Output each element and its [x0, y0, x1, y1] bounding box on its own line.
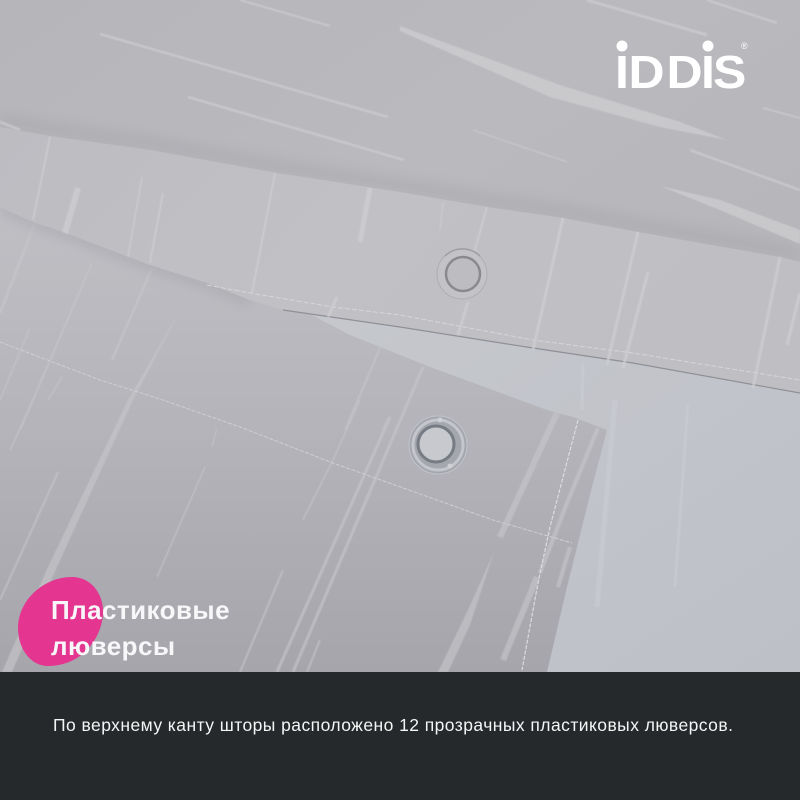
light underside layer [250, 300, 800, 672]
heading [51, 595, 230, 661]
fold shadow [0, 207, 250, 300]
lower flap [0, 200, 607, 672]
caption band [0, 672, 800, 800]
logo: IDDIS: ® [741, 41, 748, 51]
heading: Пластиковые [51, 595, 230, 625]
heading: люверсы [51, 631, 176, 661]
upper curtain layer [0, 0, 800, 320]
hem with stitching [0, 127, 800, 393]
logo: IDDIS: IDDIS [615, 48, 746, 98]
grommet: upper [437, 249, 487, 299]
caption text: По верхнему канту шторы расположено 12 прозрачных пластиковых люверсов. [53, 715, 733, 735]
faint lines on underside [410, 363, 688, 607]
grommet: lower [409, 416, 467, 474]
